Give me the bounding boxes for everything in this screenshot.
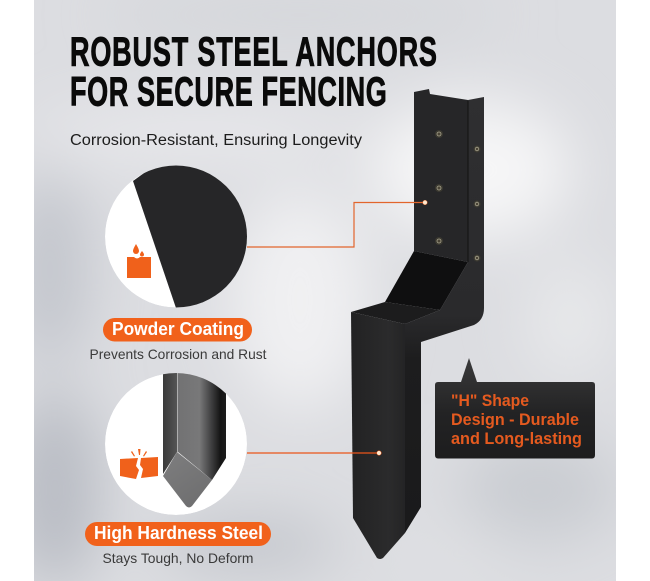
detail circle: high hardness steel bbox=[105, 372, 247, 515]
upper back plate bbox=[414, 89, 468, 262]
caption: high hardness steel: Stays Tough, No Deform bbox=[102, 550, 254, 566]
title: ROBUST STEEL ANCHORS bbox=[70, 30, 437, 75]
fold line bbox=[467, 101, 469, 262]
label: powder coating: Powder Coating bbox=[112, 319, 244, 339]
detail circle: powder coating bbox=[105, 166, 247, 308]
connector line: high hardness steel bbox=[247, 451, 381, 455]
steel spike bbox=[163, 372, 226, 508]
side flange and return bbox=[405, 97, 484, 533]
label: high hardness steel: High Hardness Steel bbox=[94, 523, 263, 543]
callout: H shape design: and Long-lasting bbox=[451, 429, 582, 448]
connector line: powder coating bbox=[247, 200, 427, 247]
product: steel anchor bbox=[351, 89, 484, 559]
inner slope bbox=[385, 251, 468, 310]
caption: powder coating: Prevents Corrosion and Rust bbox=[90, 346, 267, 362]
icon: melting coating bbox=[127, 244, 151, 278]
bolts bbox=[435, 130, 481, 262]
title: FOR SECURE FENCING bbox=[70, 70, 387, 115]
title bbox=[70, 30, 437, 115]
callout: H shape design: Design - Durable bbox=[451, 410, 579, 429]
lower box face bbox=[351, 312, 405, 559]
subtitle: Corrosion-Resistant, Ensuring Longevity bbox=[70, 132, 362, 149]
callout: H shape design: "H" Shape bbox=[451, 391, 529, 410]
lower box top bbox=[351, 302, 440, 324]
callout: H shape design bbox=[435, 358, 595, 458]
icon: cracked block bbox=[120, 449, 158, 479]
